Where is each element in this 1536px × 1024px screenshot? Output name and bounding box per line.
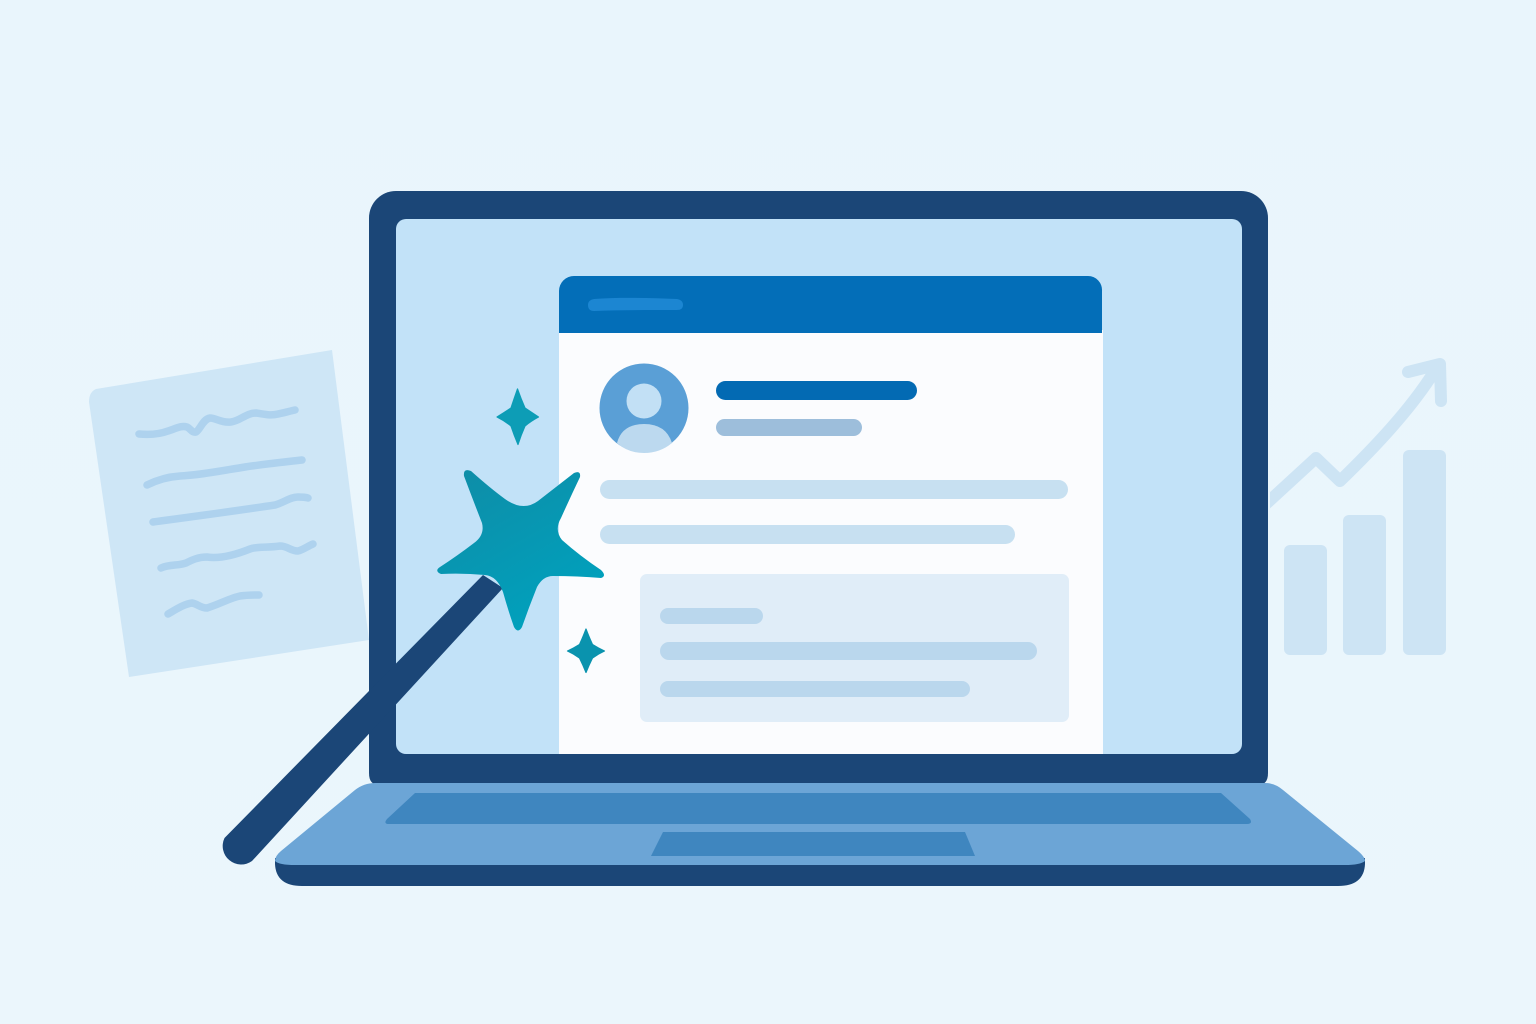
bar chart with rising arrow: [1255, 364, 1446, 655]
app window: [559, 276, 1103, 754]
document text lines: [139, 410, 313, 614]
laptop screen: [396, 219, 1242, 754]
wand star: [437, 470, 604, 630]
trend arrow: [1255, 364, 1441, 514]
sparkle: upper: [497, 389, 538, 444]
magic wand: [223, 470, 604, 864]
inner card: [640, 574, 1069, 722]
laptop base: [275, 783, 1365, 886]
window body: [559, 330, 1103, 754]
document sheet: [89, 350, 369, 677]
laptop screen bezel: [369, 191, 1268, 785]
subtitle bar: [716, 419, 862, 436]
header label: [588, 298, 683, 311]
avatar: [600, 364, 688, 453]
sparkle: lower: [568, 629, 604, 672]
window header: [559, 276, 1102, 333]
wand shaft: [223, 575, 503, 864]
laptop: [275, 191, 1365, 886]
trackpad: [651, 832, 975, 856]
text bars: [600, 480, 1068, 499]
keyboard: [385, 793, 1251, 824]
name bar: [716, 381, 917, 400]
illustration: laptop with magic wand: [89, 191, 1447, 886]
